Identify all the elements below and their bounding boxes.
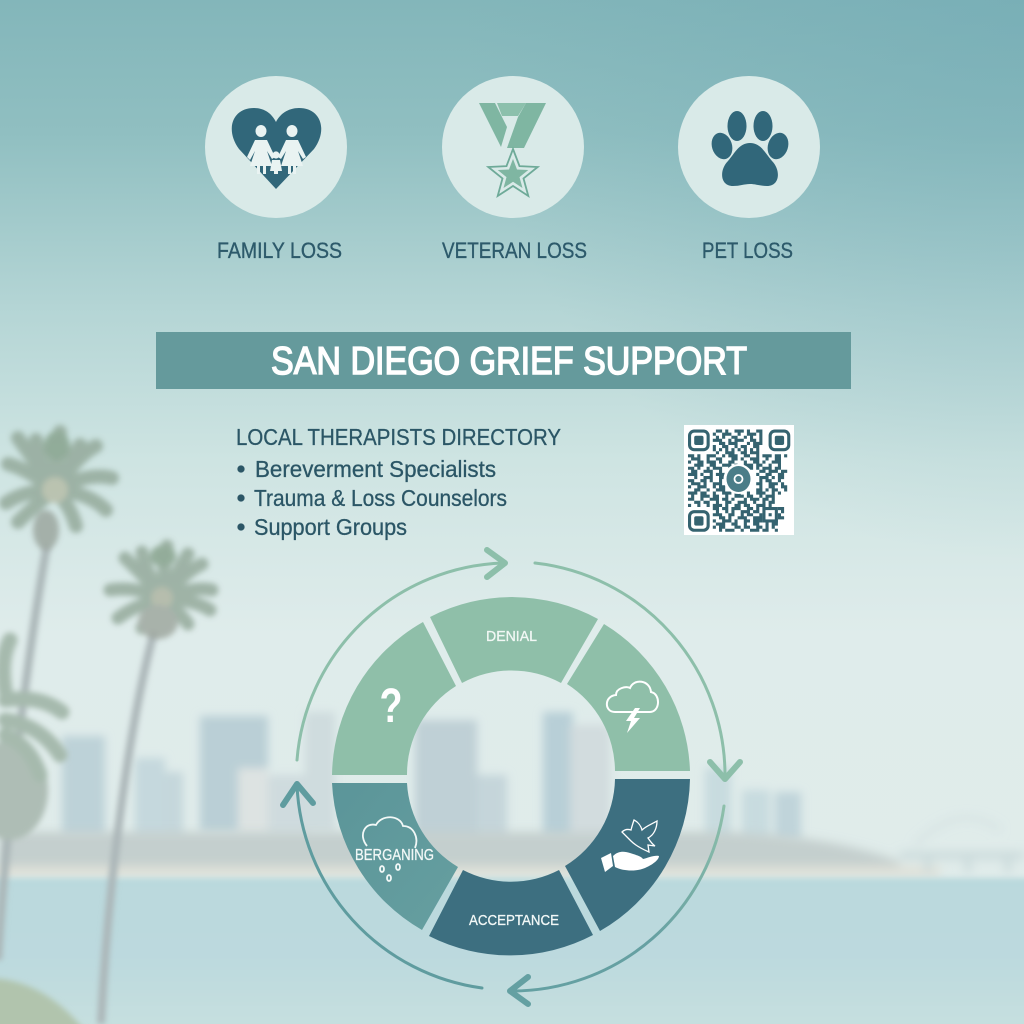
directory list: Bereverment Specialists [255,456,496,482]
directory list [238,456,507,540]
cycle diagram: stages of grief [283,550,740,1004]
segment: acceptance [429,870,593,955]
label: bargaining: BERGANING [355,847,434,864]
icon: dove over open hand [601,820,659,872]
cycle arrow: top right [535,563,740,779]
label: family loss: FAMILY LOSS [217,238,342,263]
cycle arrow: bottom right [510,806,724,1004]
panel: family loss [205,76,347,263]
label: pet loss: PET LOSS [702,238,793,263]
panel: local therapists directory [236,424,561,540]
directory heading: LOCAL THERAPISTS DIRECTORY [236,424,561,450]
title: SAN DIEGO GRIEF SUPPORT [271,340,747,383]
shoreline, trees and beach [0,818,1024,878]
skyline buildings [62,712,801,840]
QR centre logo [724,464,754,494]
segment: denial [430,597,598,683]
directory list: Trauma & Loss Counselors [254,485,507,511]
panel: veteran loss [442,76,587,263]
cycle arrow: bottom left [283,784,482,988]
segment: anger [567,624,690,771]
label: denial: DENIAL [486,628,537,645]
directory list: Support Groups [254,514,407,540]
cycle arrow: top left [297,550,505,760]
panel: pet loss [678,76,820,263]
foreground foliage [0,978,92,1024]
icon: heart with family [232,108,321,189]
foreground palms [0,545,154,1024]
segment: peace [565,779,690,931]
icon: rain cloud [363,817,416,881]
icon: medal with star [479,103,546,196]
segment: bargaining [332,783,458,930]
label: acceptance: ACCEPTANCE [469,912,559,929]
palm crown one [6,431,112,550]
segment: bargaining question [332,622,456,775]
icon: paw print [708,111,792,186]
icon: storm cloud [607,682,658,733]
label: veteran loss: VETERAN LOSS [442,238,587,263]
palm crown two [110,545,212,639]
icon: question mark: ? [380,680,402,733]
sea [0,878,1024,1024]
title banner [156,332,851,389]
QR code [684,425,794,535]
